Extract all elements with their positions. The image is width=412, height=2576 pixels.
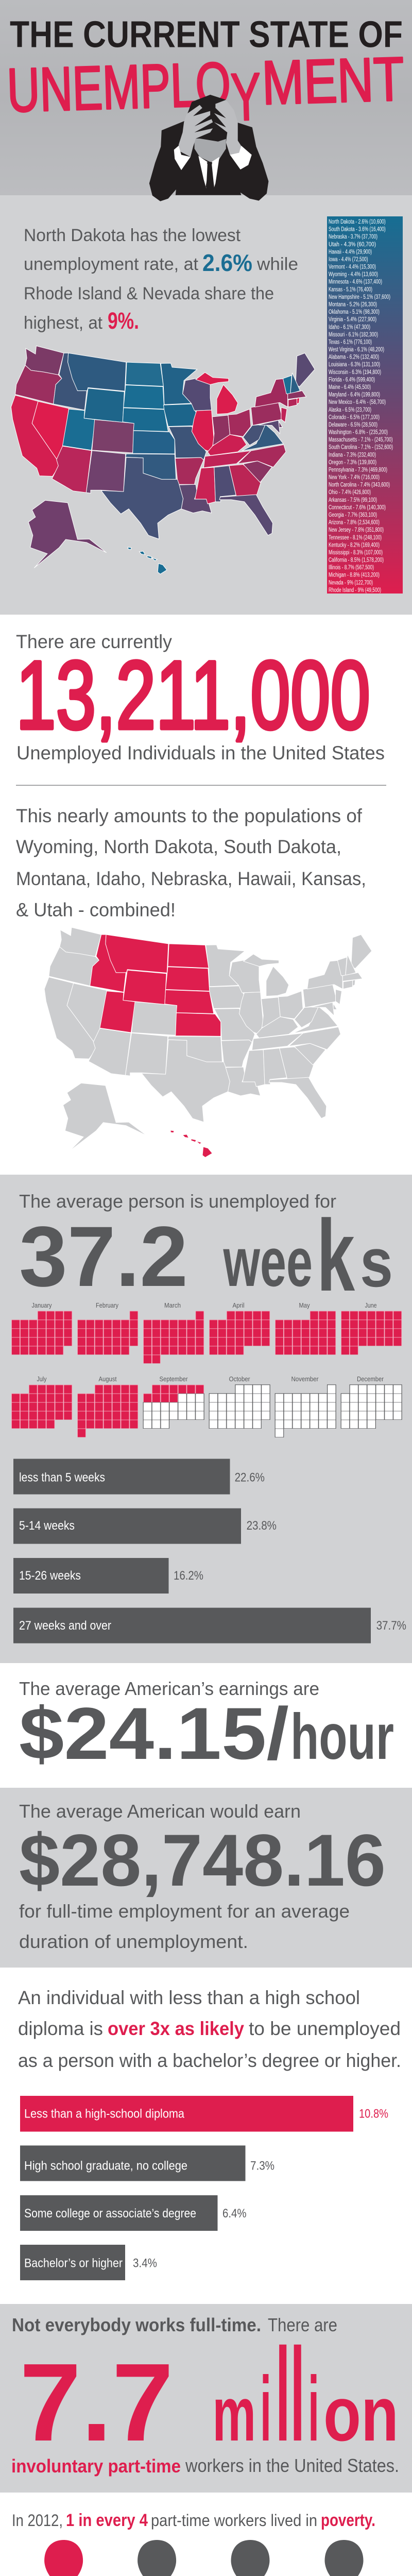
text: part-time poverty: 1 in every 4 bbox=[66, 2511, 148, 2530]
calendar chart: May bbox=[299, 1301, 310, 1309]
text: full-time duration: for full-time employment for an average bbox=[19, 1901, 350, 1922]
title: unemployment: Y bbox=[230, 59, 262, 135]
bar chart: education: Some college or associate’s degree bbox=[24, 2207, 196, 2221]
state list panel: Maryland - 6.4% (199,800) bbox=[329, 392, 380, 398]
state list panel: Pennsylvania - 7.3% (469,800) bbox=[329, 467, 387, 473]
text: education comparison: An individual with less than a high school bbox=[18, 1987, 360, 2008]
text: unemployed individuals: Unemployed Individuals in the United States bbox=[16, 742, 385, 764]
panel: education bbox=[18, 1987, 401, 2280]
intro text: highest, at bbox=[24, 313, 103, 333]
text: earnings: The average American’s earnings are bbox=[19, 1678, 319, 1699]
state list panel: Texas - 6.1% (776,100) bbox=[329, 339, 372, 345]
state list panel: Arkansas - 7.5% (99,100) bbox=[329, 497, 377, 503]
state list panel: Washington - 6.8% - (235,200) bbox=[329, 430, 388, 436]
state list panel: Wyoming - 4.4% (13,600) bbox=[329, 272, 378, 278]
text: average person: The average person is unemployed for bbox=[19, 1191, 336, 1212]
text: population comparison bbox=[16, 805, 366, 920]
text: part-time poverty: part-time workers lived in bbox=[151, 2511, 317, 2530]
calendar chart bbox=[11, 1301, 402, 1437]
bar chart: duration: less than 5 weeks bbox=[19, 1470, 105, 1484]
text: there are currently: There are currently bbox=[16, 631, 172, 652]
state list panel bbox=[327, 216, 403, 594]
calendar chart: June bbox=[365, 1301, 377, 1309]
intro text: while bbox=[256, 255, 298, 274]
text: education comparison: to be unemployed bbox=[249, 2018, 401, 2039]
state list panel: Alabama - 6.2% (132,400) bbox=[329, 354, 379, 361]
calendar chart: February bbox=[96, 1301, 118, 1309]
calendar chart: November bbox=[291, 1375, 319, 1383]
state list panel: Kansas - 5.1% (76,400) bbox=[329, 286, 372, 293]
state list panel: Wisconsin - 6.3% (194,800) bbox=[329, 369, 381, 376]
big number: hourly wage: $24.15/ bbox=[19, 1693, 289, 1775]
intro text bbox=[24, 226, 298, 334]
heading: not everybody works full-time: Not everybody works full-time. bbox=[12, 2314, 261, 2335]
bar chart: education: 6.4% bbox=[222, 2207, 247, 2221]
big number: 37.2 weeks: 37.2 bbox=[19, 1209, 188, 1304]
bar chart: duration: 27 weeks and over bbox=[19, 1619, 111, 1633]
state list panel: Kentucky - 8.2% (169,400) bbox=[329, 542, 380, 548]
title: unemployment: UNEMPLO bbox=[6, 49, 232, 125]
calendar chart: August bbox=[99, 1375, 117, 1383]
state list panel: New Mexico - 6.4% - (58,700) bbox=[329, 399, 386, 405]
bar chart: duration: 23.8% bbox=[247, 1519, 277, 1533]
big number: 7.7 million: i bbox=[308, 2358, 319, 2460]
calendar chart: April bbox=[233, 1301, 245, 1309]
state list panel: Tennessee - 8.1% (248,100) bbox=[329, 535, 382, 541]
text: population comparison: This nearly amounts to the populations of bbox=[16, 805, 363, 826]
intro text: unemployment rate, at bbox=[24, 255, 199, 274]
big number: 7.7 million: i bbox=[260, 2358, 271, 2460]
panel: state unemployment rates bbox=[0, 195, 412, 615]
calendar chart: January bbox=[32, 1301, 52, 1309]
state list panel: Arizona - 7.8% (2,534,600) bbox=[329, 520, 380, 526]
text: part-time poverty bbox=[12, 2511, 375, 2530]
state list panel: Delaware - 6.5% (28,500) bbox=[329, 422, 377, 428]
big number: 7.7 million: m bbox=[199, 2370, 256, 2457]
bar chart: duration: 22.6% bbox=[235, 1470, 265, 1484]
bar chart: education: 10.8% bbox=[359, 2107, 388, 2121]
state list panel: New Hampshire - 5.1% (37,600) bbox=[329, 294, 390, 300]
state list panel: Vermont - 4.4% (15,300) bbox=[329, 264, 376, 270]
icon: despairing man in a suit bbox=[149, 95, 268, 201]
calendar chart: September bbox=[160, 1375, 188, 1383]
big number: 7.7 million: 7.7 bbox=[20, 2340, 174, 2464]
bar chart: education: 7.3% bbox=[250, 2159, 274, 2173]
state list panel: Connecticut - 7.6% (140,300) bbox=[329, 504, 386, 511]
state list panel: New York - 7.4% (716,000) bbox=[329, 474, 380, 481]
state list panel: North Carolina - 7.4% (343,600) bbox=[329, 482, 390, 488]
intro text: 2.6% bbox=[202, 249, 252, 276]
panel: header bbox=[0, 0, 412, 195]
calendar chart: October bbox=[229, 1375, 250, 1383]
state list panel: Nevada - 9% (122,700) bbox=[329, 580, 373, 586]
state list panel: Idaho - 6.1% (47,300) bbox=[329, 324, 370, 330]
bar chart: duration: 16.2% bbox=[174, 1569, 203, 1583]
text: population comparison: Wyoming, North Dakota, South Dakota, bbox=[16, 836, 341, 857]
panel: poverty bbox=[12, 2511, 388, 2576]
text: population comparison: & Utah - combined! bbox=[16, 900, 176, 920]
text: part-time poverty: poverty. bbox=[321, 2511, 375, 2530]
bar chart: duration: 15-26 weeks bbox=[19, 1569, 81, 1583]
intro text: North Dakota has the lowest bbox=[24, 226, 241, 245]
text: involuntary part-time: involuntary part-time bbox=[11, 2455, 181, 2477]
state list panel: Indiana - 7.3% (232,400) bbox=[329, 452, 376, 458]
state list panel: Mississippi - 8.3% (107,000) bbox=[329, 550, 383, 556]
text: part-time poverty: In 2012, bbox=[12, 2511, 63, 2530]
panel: hourly earnings bbox=[19, 1678, 394, 1775]
text: education comparison: over 3x as likely bbox=[108, 2018, 244, 2039]
state list panel: Oklahoma - 5.1% (98,300) bbox=[329, 309, 380, 315]
text: full-time duration bbox=[19, 1901, 350, 1952]
panel: part-time workers bbox=[0, 2304, 412, 2493]
state list panel: Nebraska - 3.7% (37,700) bbox=[329, 234, 377, 240]
bar chart: duration bbox=[13, 1459, 406, 1643]
state list panel: Rhode Island - 9% (49,500) bbox=[329, 587, 381, 594]
calendar chart: March bbox=[164, 1301, 181, 1309]
state list panel: Florida - 6.4% (599,400) bbox=[329, 377, 375, 383]
text: would earn: The average American would earn bbox=[19, 1801, 301, 1822]
state list panel: Louisiana - 6.3% (131,100) bbox=[329, 362, 380, 368]
intro text: Rhode Island & Nevada share the bbox=[24, 284, 274, 303]
state list panel: Illinois - 8.7% (567,500) bbox=[329, 565, 374, 571]
bar chart: education: Bachelor’s or higher bbox=[24, 2257, 123, 2270]
text: education comparison: as a person with a bachelor’s degree or higher. bbox=[18, 2050, 401, 2071]
state list panel: Alaska - 6.5% (23,700) bbox=[329, 407, 371, 413]
state list panel: Virginia - 5.4% (227,900) bbox=[329, 317, 376, 323]
big number: 37.2 weeks: s bbox=[360, 1224, 393, 1301]
icons: one in four people bbox=[28, 2540, 380, 2576]
state list panel: Ohio - 7.4% (426,800) bbox=[329, 489, 371, 496]
panel: full-time earnings bbox=[0, 1788, 412, 1968]
choropleth map of the United States bbox=[11, 346, 315, 574]
text: population comparison: Montana, Idaho, Nebraska, Hawaii, Kansas, bbox=[16, 868, 366, 889]
state list panel: Iowa - 4.4% (72,500) bbox=[329, 257, 368, 263]
state list panel: Missouri - 6.1% (182,300) bbox=[329, 332, 378, 338]
state list panel: Montana - 5.2% (26,300) bbox=[329, 302, 377, 308]
heading: not everybody works full-time: There are bbox=[268, 2314, 337, 2335]
bar chart: duration: 37.7% bbox=[376, 1619, 406, 1633]
panel: total unemployed bbox=[16, 631, 386, 1158]
state list panel: Minnesota - 4.6% (137,400) bbox=[329, 279, 382, 285]
state list panel: Maine - 6.4% (45,500) bbox=[329, 384, 371, 391]
state list panel: California - 8.5% (1,578,200) bbox=[329, 557, 384, 564]
state list panel: South Dakota - 3.6% (16,400) bbox=[329, 227, 386, 233]
state list panel: Colorado - 6.5% (177,100) bbox=[329, 414, 380, 420]
state list panel: New Jersey - 7.8% (351,800) bbox=[329, 527, 384, 533]
bar chart: education: Less than a high-school diploma bbox=[24, 2107, 185, 2121]
state list panel: Hawaii - 4.4% (29,900) bbox=[329, 249, 372, 255]
panel: average duration bbox=[0, 1175, 412, 1663]
state list panel: Georgia - 7.7% (363,100) bbox=[329, 512, 377, 518]
big number: 37.2 weeks: k bbox=[317, 1199, 355, 1312]
big number: earnings: $28,748.16 bbox=[19, 1820, 386, 1902]
text: education comparison: diploma is bbox=[18, 2018, 103, 2039]
state list panel: West Virginia - 6.1% (48,200) bbox=[329, 347, 384, 353]
big number: 37.2 weeks: wee bbox=[210, 1223, 313, 1301]
big number: 7.7 million: ll bbox=[276, 2321, 305, 2469]
map: highlighted states bbox=[44, 927, 372, 1158]
calendar chart: December bbox=[357, 1375, 384, 1383]
bar chart: education bbox=[20, 2096, 388, 2280]
state list panel: North Dakota - 2.6% (10,600) bbox=[329, 219, 386, 225]
state list panel: Utah - 4.3% (60,700) bbox=[329, 242, 376, 248]
state list panel: Michigan - 8.8% (413,200) bbox=[329, 572, 380, 579]
text: education comparison bbox=[18, 1987, 401, 2071]
bar chart: education: 3.4% bbox=[133, 2257, 157, 2270]
intro text: 9%. bbox=[108, 308, 139, 334]
bar chart: education: High school graduate, no college bbox=[24, 2159, 187, 2173]
text: full-time duration: duration of unemployment. bbox=[19, 1931, 248, 1952]
text: involuntary part-time bbox=[11, 2455, 399, 2477]
bar chart: duration: 5-14 weeks bbox=[19, 1519, 75, 1533]
calendar chart: July bbox=[37, 1375, 47, 1383]
state list panel: Oregon - 7.3% (139,800) bbox=[329, 460, 376, 466]
